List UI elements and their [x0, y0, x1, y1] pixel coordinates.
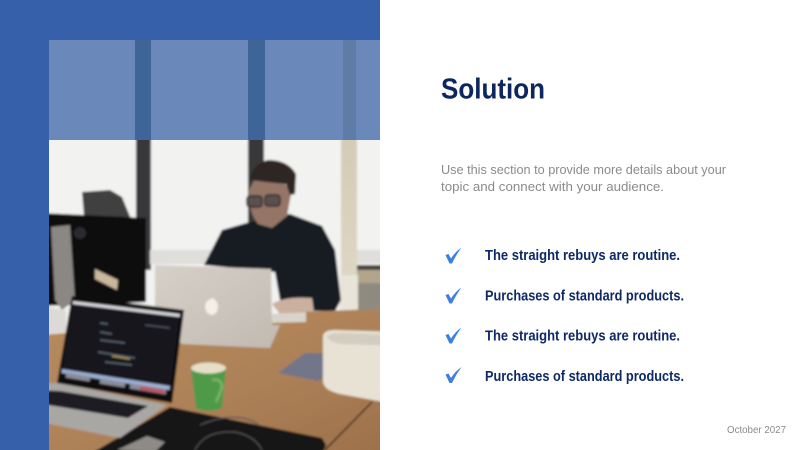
window background: [49, 140, 380, 336]
item 2: Purchases of standard products.: [485, 288, 684, 304]
checklist: [446, 248, 684, 385]
item 4: Purchases of standard products.: [485, 369, 684, 385]
table edge: [325, 402, 372, 450]
green mug: [191, 362, 226, 411]
item 1: The straight rebuys are routine.: [485, 248, 680, 264]
notebook: [278, 353, 323, 381]
description text: topic and connect with your audience.: [441, 179, 664, 194]
date: October 2027: [727, 424, 786, 436]
icon: check 3: [446, 328, 462, 344]
front laptop: [30, 296, 184, 438]
description text: [441, 162, 727, 194]
photo: office desk with laptops: [49, 140, 380, 450]
black mat with cables: [80, 407, 326, 450]
man at laptop: [204, 160, 341, 314]
icon: check 2: [446, 288, 462, 304]
icon: check 1: [446, 248, 462, 264]
office chair: [82, 190, 131, 219]
window frames: [134, 140, 380, 312]
description text: Use this section to provide more details about your: [441, 162, 727, 177]
white container: [321, 328, 380, 404]
papers under laptop: [271, 312, 306, 323]
table: [49, 308, 380, 450]
panel: blue side band: [0, 0, 380, 450]
icon: check 4: [446, 367, 462, 383]
title: Solution: [441, 74, 545, 106]
back monitor: [40, 213, 146, 335]
rear laptop: [155, 265, 280, 348]
translucent blue overlay on photo top: [49, 40, 380, 140]
item 3: The straight rebuys are routine.: [485, 328, 680, 344]
